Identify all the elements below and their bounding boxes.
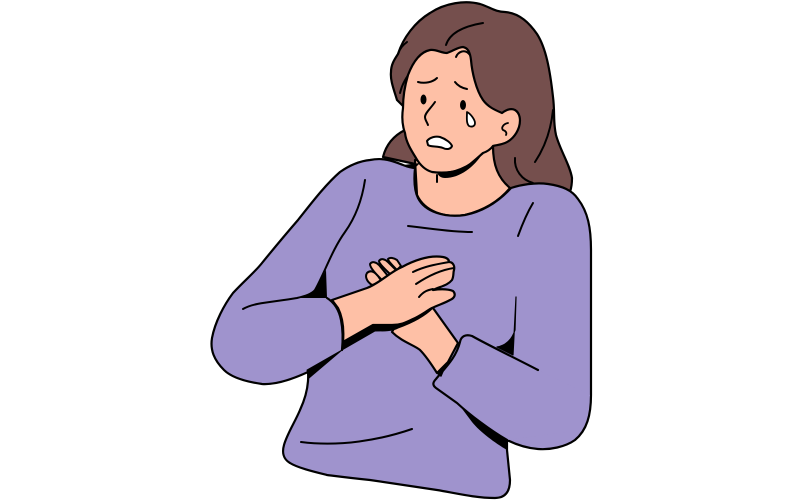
forehead crease bbox=[456, 51, 470, 57]
upper hand and forearm bbox=[332, 257, 455, 342]
sweater bbox=[212, 159, 591, 498]
chest line bbox=[408, 226, 472, 232]
shadow under wrist bbox=[342, 308, 433, 350]
ear detail bbox=[502, 123, 508, 135]
mouth bbox=[427, 137, 452, 149]
hem line bbox=[301, 429, 412, 444]
nose bbox=[425, 102, 435, 125]
shadow right sleeve bbox=[457, 402, 507, 450]
right cuff bbox=[433, 335, 590, 440]
shadow below left sleeve bbox=[307, 350, 342, 378]
eyebrow right bbox=[455, 82, 467, 89]
neck crease bbox=[436, 175, 438, 182]
neck bbox=[415, 146, 510, 216]
eyebrow left bbox=[418, 78, 437, 83]
shadow near right cuff bbox=[497, 297, 516, 355]
hand fingers behind bbox=[366, 258, 401, 285]
face and ear bbox=[402, 47, 520, 182]
lower hand bbox=[392, 308, 458, 373]
hair bbox=[383, 2, 572, 192]
eye left bbox=[420, 94, 426, 104]
jaw shadow bbox=[437, 153, 483, 178]
shoulder line bbox=[518, 203, 533, 236]
left cuff bbox=[327, 298, 343, 350]
tear bbox=[467, 112, 475, 127]
shoulder shadow near chin bbox=[403, 163, 420, 168]
sleeve fold left bbox=[243, 180, 365, 309]
eye right bbox=[460, 100, 466, 110]
shadow left arm bbox=[297, 270, 327, 298]
